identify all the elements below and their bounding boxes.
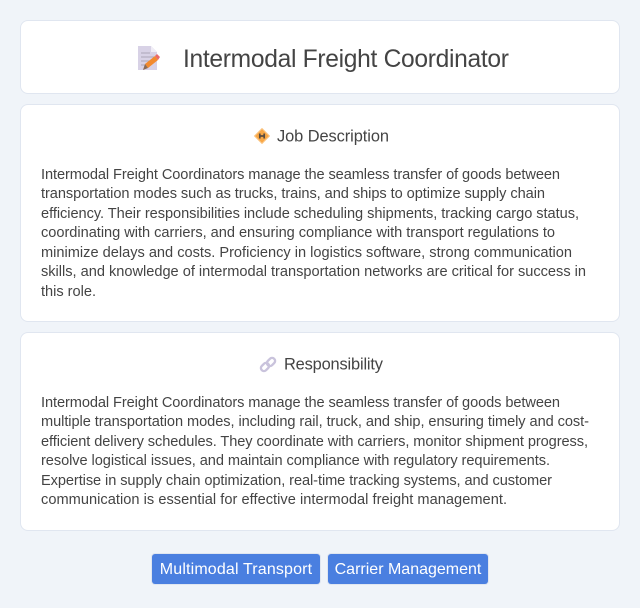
panel: responsibility [20,332,620,531]
text: job description body: Intermodal Freight Coordinators manage the seamless transfer of goods between [41,167,560,183]
heading: responsibility: Responsibility [284,356,384,374]
text: responsibility body [41,395,589,508]
text: job description body: skills, and knowledge of intermodal transportation networks are critical for success in [41,264,586,280]
tag: carrier management: Carrier Management [335,561,481,578]
text: job description body: this role. [41,284,96,300]
text: responsibility body: Expertise in supply chain optimization, real-time tracking systems, and customer [41,473,552,489]
panel: job description [20,104,620,322]
text: responsibility body: Intermodal Freight Coordinators manage the seamless transfer of goods between [41,395,560,411]
tag: carrier management [328,554,488,584]
icon: document with pencil [138,46,160,70]
text: job description body: transportation modes such as trucks, trains, and ships to optimize supply chain [41,186,545,202]
heading: job title: Intermodal Freight Coordinator [183,46,509,73]
text: responsibility body: efficient delivery schedules. They coordinate with carriers, monitor shipment progress, [41,434,588,450]
icon: chain link [260,357,276,372]
text: job description body [41,167,586,300]
panel: title [20,20,620,94]
tag: multimodal transport: Multimodal Transport [160,561,312,578]
text: responsibility body: multiple transportation modes, including rail, truck, and ship, ensuring timely and cost- [41,414,589,430]
text: job description body: coordinating with carriers, and ensuring compliance with transport regulations to [41,225,555,241]
tag: multimodal transport [152,554,320,584]
icon: diamond road sign [254,128,270,144]
text: job description body: efficiency. Their responsibilities include scheduling shipments, tracking cargo status, [41,206,579,222]
text: responsibility body: communication is essential for effective intermodal freight management. [41,492,507,508]
text: job description body: minimize delays and costs. Proficiency in logistics software, strong communication [41,245,572,261]
text: responsibility body: resolve logistical issues, and maintain compliance with regulatory requirements. [41,453,550,469]
heading: job description: Job Description [277,128,389,146]
